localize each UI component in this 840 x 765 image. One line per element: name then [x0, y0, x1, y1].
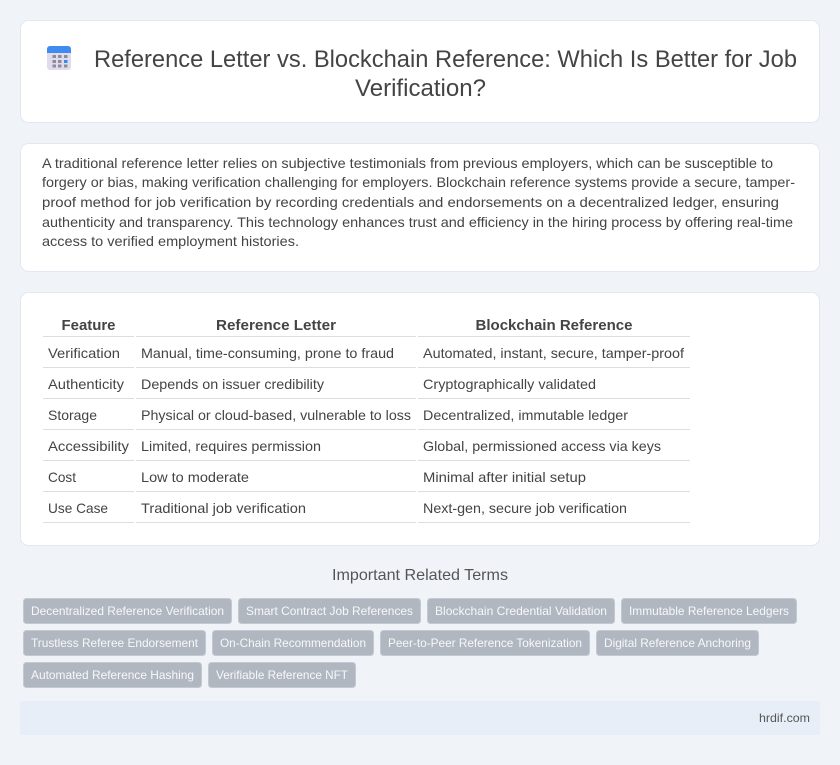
table row: cost: Cost	[48, 469, 76, 485]
tag: Verifiable Reference NFT	[216, 668, 349, 682]
table row: use case: Use Case	[48, 500, 108, 516]
tag	[208, 662, 356, 688]
icon: calendar	[47, 46, 71, 70]
table row: accessibility: Accessibility	[48, 438, 129, 454]
tag	[24, 630, 206, 656]
footer	[20, 701, 820, 735]
panel: comparison table	[20, 292, 820, 546]
tag	[622, 598, 796, 624]
table header: Blockchain Reference	[476, 317, 632, 334]
table header	[62, 317, 632, 334]
tag	[212, 630, 374, 656]
text block: summary: A traditional reference letter relies on subjective testimonials from previous employers, which can be susceptible to	[42, 155, 773, 171]
table row: authenticity	[48, 376, 596, 392]
tag	[24, 662, 202, 688]
text block: summary	[42, 155, 795, 249]
table row: accessibility: Global, permissioned access via keys	[423, 438, 661, 454]
table row: verification: Manual, time-consuming, prone to fraud	[141, 345, 394, 361]
table header: Feature	[62, 317, 116, 334]
panel: header	[20, 20, 820, 122]
table row: authenticity: Depends on issuer credibility	[141, 376, 324, 392]
table row: authenticity: Cryptographically validated	[423, 376, 596, 392]
text block: summary: forgery or bias, making verification challenging for employers. Blockchain reference systems provide a secure, tamper-	[42, 174, 795, 190]
tag: On-Chain Recommendation	[220, 636, 366, 650]
table row: cost: Low to moderate	[141, 469, 249, 485]
table row: authenticity: Authenticity	[48, 376, 124, 392]
tag: Automated Reference Hashing	[31, 668, 194, 682]
table row: use case: Next-gen, secure job verification	[423, 500, 627, 516]
table row: storage	[48, 407, 628, 423]
table row: cost: Minimal after initial setup	[423, 469, 586, 485]
table row: verification: Verification	[48, 345, 120, 361]
tag: Immutable Reference Ledgers	[629, 604, 789, 618]
tag: Blockchain Credential Validation	[435, 604, 607, 618]
table rules	[43, 336, 690, 522]
heading: related terms: Important Related Terms	[332, 567, 508, 584]
table row: accessibility: Limited, requires permission	[141, 438, 321, 454]
footer: hrdif.com	[759, 711, 810, 725]
title: Verification?	[355, 75, 486, 102]
table row: use case: Traditional job verification	[141, 500, 306, 516]
table header: Reference Letter	[216, 317, 336, 334]
tag	[596, 630, 758, 656]
table row: cost	[48, 469, 586, 485]
table row: use case	[48, 500, 627, 516]
table row: storage: Storage	[48, 407, 97, 423]
tag: Peer-to-Peer Reference Tokenization	[388, 636, 582, 650]
tag: Smart Contract Job References	[246, 604, 413, 618]
tag	[428, 598, 614, 624]
table row: verification: Automated, instant, secure, tamper-proof	[423, 345, 684, 361]
tag	[24, 598, 232, 624]
table row: verification	[48, 345, 684, 361]
tags: related terms	[24, 598, 796, 688]
tag: Digital Reference Anchoring	[604, 636, 751, 650]
table row: storage: Decentralized, immutable ledger	[423, 407, 628, 423]
text block: summary: access to verified employment histories.	[42, 233, 299, 249]
table row: accessibility	[48, 438, 661, 454]
text block: summary: proof method for job verification by recording credentials and endorsements on a decentralized ledger, ensuring	[42, 194, 779, 210]
tag: Trustless Referee Endorsement	[31, 636, 199, 650]
panel: summary paragraph	[20, 144, 820, 272]
title: Reference Letter vs. Blockchain Reference: Which Is Better for Job	[94, 46, 797, 73]
tag	[380, 630, 590, 656]
tag	[238, 598, 420, 624]
title	[94, 46, 797, 102]
table row: storage: Physical or cloud-based, vulnerable to loss	[141, 407, 411, 423]
tag: Decentralized Reference Verification	[31, 604, 224, 618]
text block: summary: authenticity and transparency. This technology enhances trust and efficiency in the hiring process by offering real-time	[42, 214, 793, 230]
